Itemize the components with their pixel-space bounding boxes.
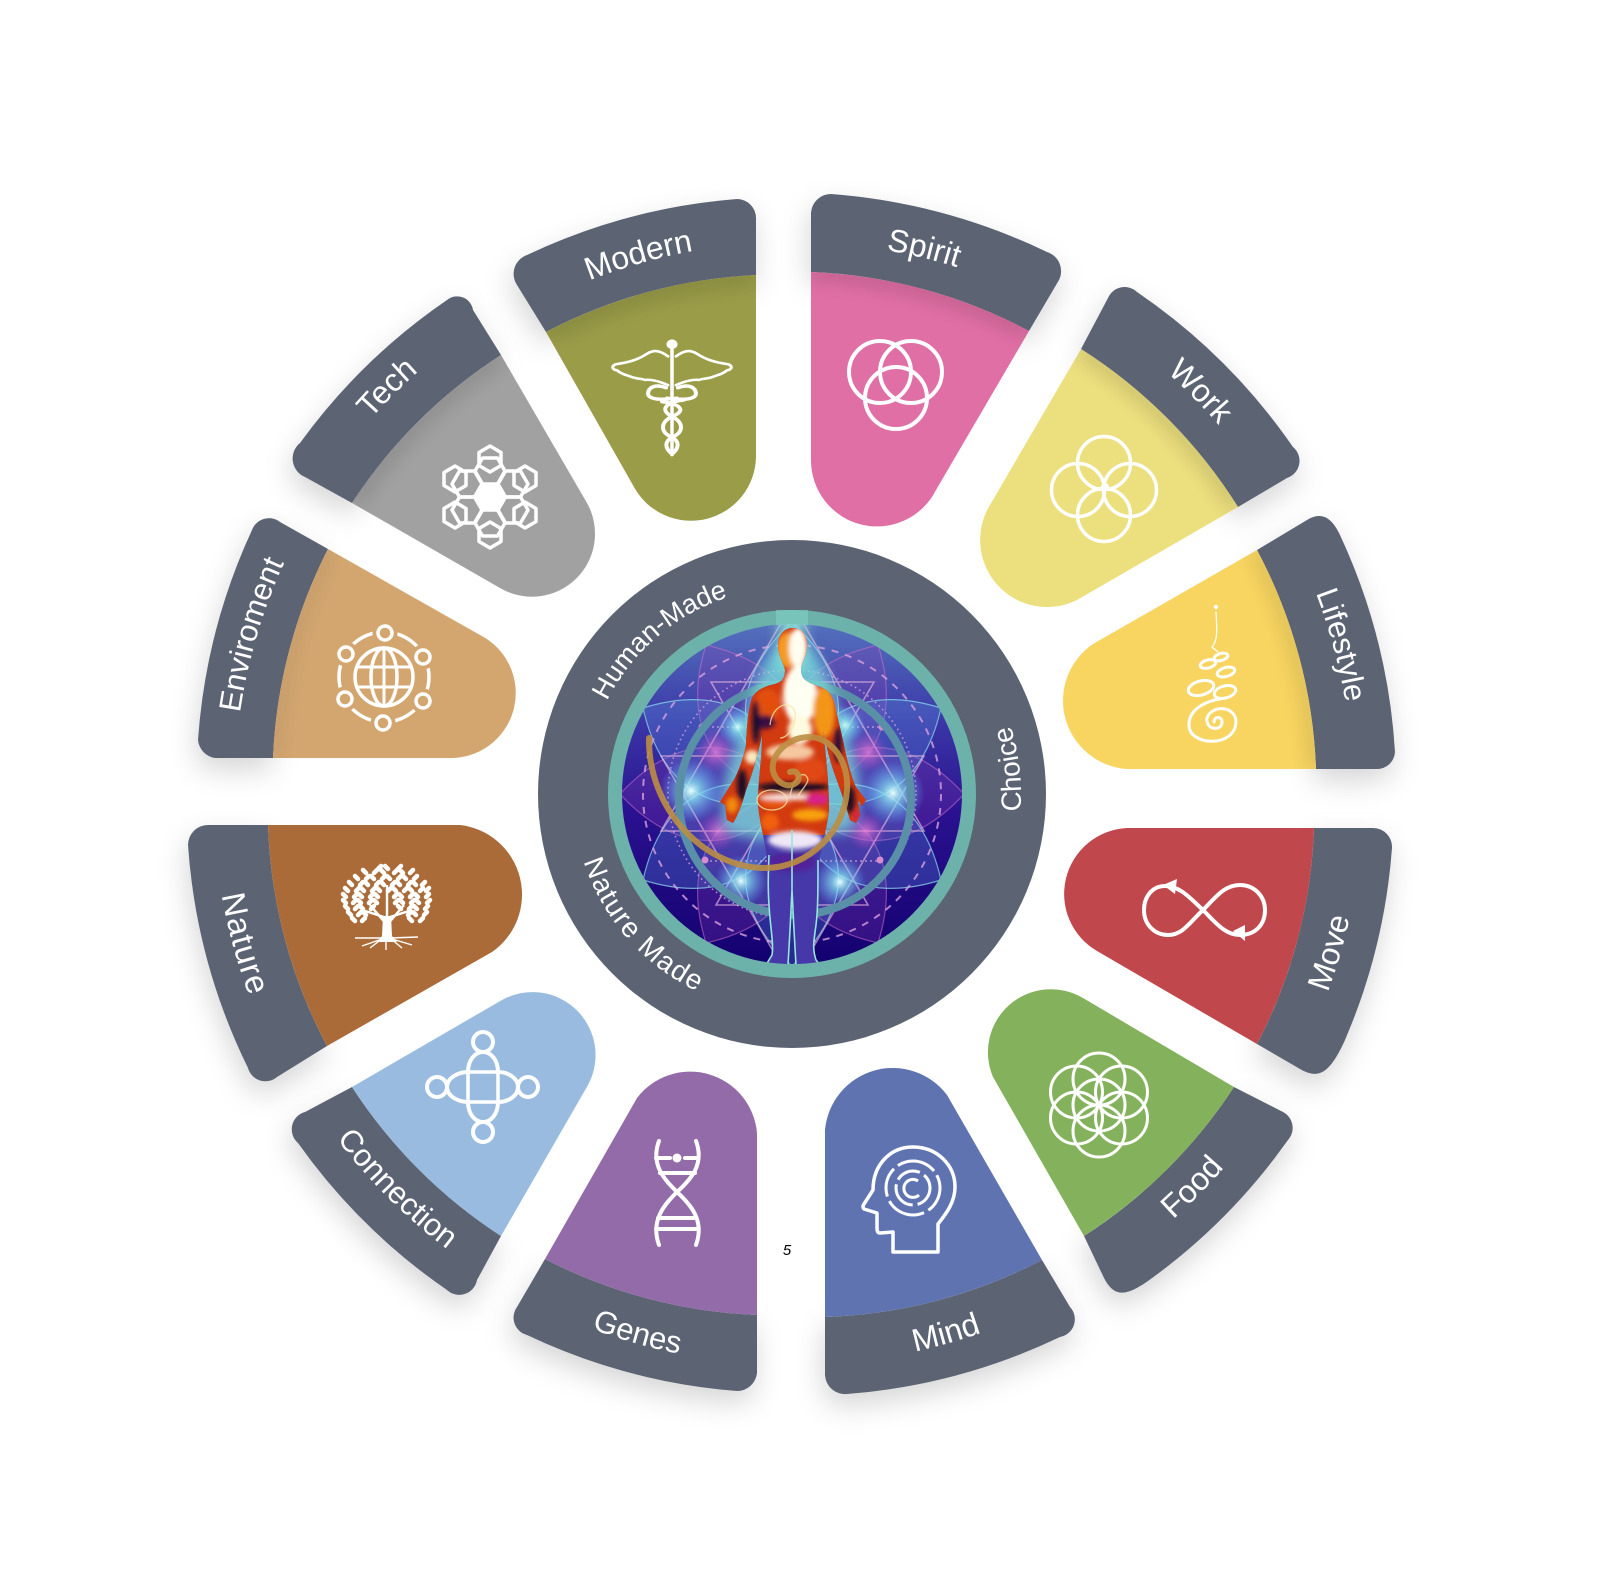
Tech colour body <box>352 355 595 597</box>
panel: Move <box>1064 828 1400 1094</box>
Mind label: Mind <box>912 1311 980 1352</box>
page number: 5 <box>783 1242 792 1259</box>
Enviroment label: Enviroment <box>219 556 284 710</box>
panel: Spirit <box>798 194 1066 526</box>
panel: Nature <box>176 825 522 1100</box>
panel: Enviroment <box>186 518 516 782</box>
panel: Genes <box>504 1072 766 1412</box>
hub disc <box>538 540 1046 1048</box>
icon: unalome <box>1187 605 1237 741</box>
head beam over ring <box>776 610 808 625</box>
panel: Mind <box>812 1068 1080 1416</box>
icon: hexagon lattice <box>444 446 536 548</box>
panel: Connection <box>282 992 596 1314</box>
hub label: Nature Made: Nature Made <box>584 856 700 989</box>
Mind label band <box>825 1260 1075 1394</box>
Move label: Move <box>1308 916 1348 990</box>
icon: three circles <box>849 341 942 429</box>
panel: Modern <box>504 199 766 521</box>
hub label: Human-Made: Human-Made <box>592 585 726 700</box>
dashed and dotted circles <box>643 645 941 943</box>
Genes label band <box>514 1259 757 1391</box>
star glows <box>659 705 925 908</box>
Enviroment colour body <box>273 549 516 758</box>
Lifestyle colour body <box>1063 550 1316 769</box>
Nature label: Nature <box>222 893 264 993</box>
Nature colour body <box>268 825 522 1046</box>
Food label: Food <box>1160 1154 1223 1218</box>
icon: infinity loop <box>1144 879 1265 941</box>
Modern colour body <box>546 275 756 521</box>
panel: Tech <box>284 296 595 597</box>
Food label band <box>1084 1087 1293 1293</box>
Move colour body <box>1064 828 1314 1044</box>
Spirit colour body <box>811 272 1029 526</box>
icon: four connected nodes <box>427 1032 538 1142</box>
Lifestyle label: Lifestyle <box>1316 588 1364 700</box>
hub label: Choice: Choice <box>998 728 1022 810</box>
gold spiral <box>649 737 847 868</box>
purple petals <box>622 645 962 943</box>
Tech label band <box>293 296 501 503</box>
icon: caduceus <box>613 339 731 455</box>
Food colour body <box>988 989 1234 1236</box>
Connection label: Connection <box>341 1130 454 1248</box>
Connection label band <box>292 1087 501 1295</box>
panel: Food <box>988 989 1298 1312</box>
Spirit label: Spirit <box>888 230 962 267</box>
Work label band <box>1081 287 1300 507</box>
Mind colour body <box>825 1068 1042 1317</box>
Work label: Work <box>1172 356 1232 426</box>
artwork background <box>620 622 964 966</box>
icon: four interlaced circles <box>1052 436 1156 542</box>
hexagram triangles <box>660 624 926 950</box>
central artwork: sacred geometry and human figure <box>622 624 962 964</box>
Move label band <box>1257 828 1392 1074</box>
panel: Lifestyle <box>1063 516 1402 792</box>
Enviroment label band <box>198 518 328 758</box>
Spirit label band <box>811 194 1061 331</box>
Nature label band <box>188 825 327 1081</box>
icon: head with maze <box>863 1147 955 1252</box>
Work colour body <box>980 349 1238 607</box>
outer teal ring <box>615 617 969 971</box>
blue petals <box>643 625 941 964</box>
panel: Work <box>980 287 1304 607</box>
body aura <box>722 600 860 840</box>
Lifestyle label band <box>1257 516 1395 769</box>
icon: tree of life <box>343 866 430 950</box>
human figure <box>720 628 866 964</box>
Genes colour body <box>545 1072 757 1315</box>
icon: flower of life <box>1050 1053 1148 1157</box>
panel: central hub <box>538 540 1046 1048</box>
icon: DNA helix <box>656 1141 699 1245</box>
Modern label band <box>514 199 756 332</box>
Connection colour body <box>352 992 596 1236</box>
inner teal ring <box>679 683 911 915</box>
Modern label: Modern <box>584 235 692 280</box>
Tech label: Tech <box>354 362 417 413</box>
Genes label: Genes <box>596 1312 680 1353</box>
icon: globe with nodes <box>335 623 433 733</box>
